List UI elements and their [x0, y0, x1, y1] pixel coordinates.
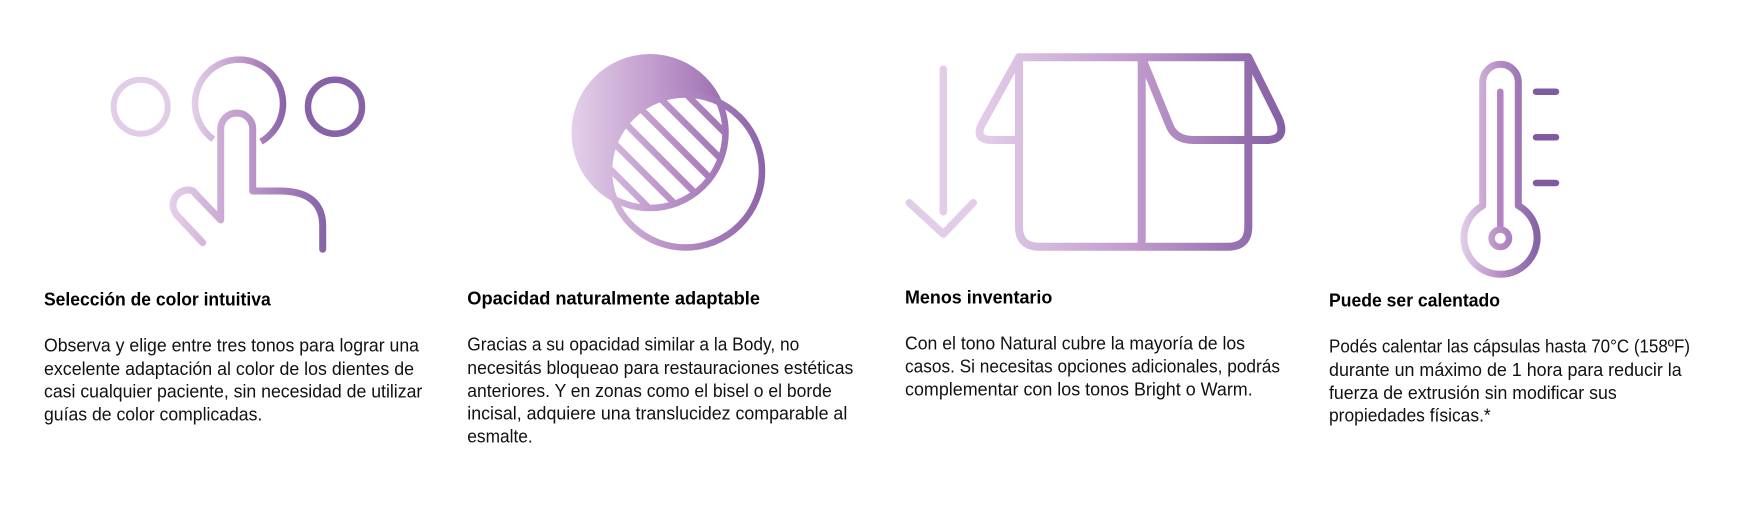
text block: opacidad: Gracias a su opacidad similar a la Body, no [467, 334, 799, 355]
text block: opacidad: incisal, adquiere una translucidez comparable al [467, 403, 847, 424]
text block: opacidad: necesitás bloqueao para restauraciones estéticas [467, 357, 853, 378]
panel: opacidad [468, 54, 853, 442]
text block: selección de color: guías de color complicadas. [44, 404, 262, 425]
panel: menos inventario [905, 57, 1281, 400]
text block: puede ser calentado: fuerza de extrusión sin modificar sus [1329, 382, 1617, 403]
text block: opacidad: esmalte. [467, 426, 533, 447]
text block: opacidad [467, 334, 853, 447]
panel: puede ser calentado [1329, 64, 1690, 426]
text block: menos inventario: casos. Si necesitas opciones adicionales, podrás [905, 355, 1280, 376]
heading: selección de color: Selección de color intuitiva [44, 289, 271, 310]
icon: thermometer [1464, 64, 1556, 274]
icon: open box [980, 57, 1281, 247]
heading: menos inventario: Menos inventario [905, 286, 1052, 307]
heading: opacidad: Opacidad naturalmente adaptable [467, 287, 760, 308]
text block: puede ser calentado: durante un máximo de 1 hora para reducir la [1329, 359, 1682, 380]
text block: opacidad: anteriores. Y en zonas como el bisel o el borde [467, 380, 832, 401]
text block: menos inventario: Con el tono Natural cubre la mayoría de los [905, 333, 1245, 354]
text block: menos inventario [905, 333, 1280, 400]
text block: selección de color: Observa y elige entre tres tonos para lograr una [44, 335, 420, 356]
text block: puede ser calentado: Podés calentar las cápsulas hasta 70°C (158ºF) [1329, 336, 1690, 357]
icon: overlapping circles with hatching [572, 54, 766, 251]
icon: color selection with pointing hand [114, 60, 362, 249]
icon: down arrow [909, 69, 973, 234]
text block: selección de color: casi cualquier paciente, sin necesidad de utilizar [44, 381, 422, 402]
text block: selección de color [44, 335, 422, 425]
panel: selección de color [44, 60, 422, 425]
text block: menos inventario: complementar con los tonos Bright o Warm. [905, 379, 1253, 400]
text block: selección de color: excelente adaptación al color de los dientes de [44, 358, 414, 379]
heading: puede ser calentado: Puede ser calentado [1329, 290, 1500, 311]
text block: puede ser calentado: propiedades físicas.* [1329, 405, 1491, 426]
text block: puede ser calentado [1329, 336, 1690, 426]
